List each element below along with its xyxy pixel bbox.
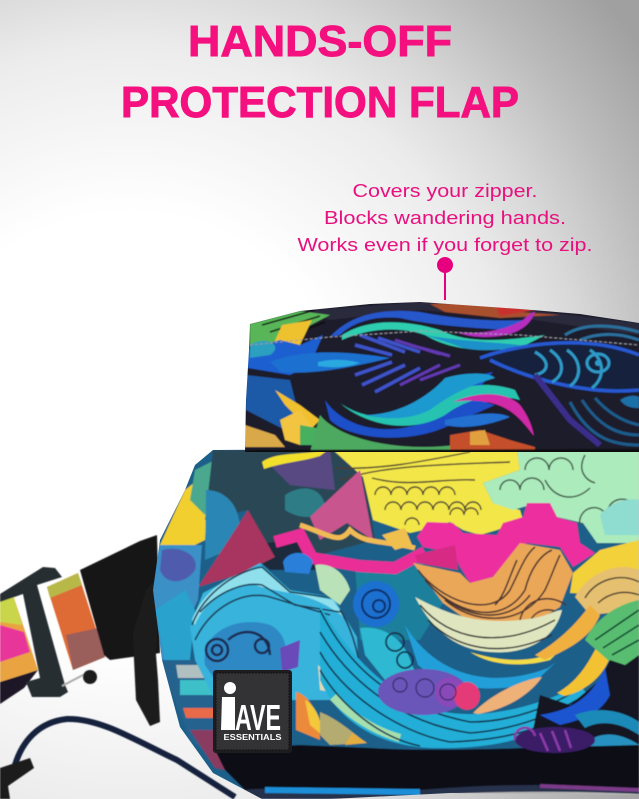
flap [240, 298, 639, 454]
right yellow band and green [556, 648, 610, 697]
lower magenta [453, 394, 534, 436]
peach swoop [473, 677, 542, 714]
pink ribbon [275, 535, 425, 568]
side blue pocket [150, 545, 202, 660]
upper magenta [457, 312, 535, 337]
side pocket yellow [160, 483, 206, 546]
bottom piping [240, 785, 639, 799]
mint clouds [483, 450, 639, 543]
orange strap [47, 573, 105, 670]
magenta cloud [417, 503, 595, 583]
bag body [150, 445, 639, 799]
title: HANDS-OFF [188, 17, 452, 66]
lower strap [15, 719, 235, 797]
buckle [0, 567, 68, 697]
dark upper left pattern [205, 450, 375, 560]
cream swoop [415, 597, 562, 652]
flap stitching [250, 331, 639, 345]
flap lower green [310, 415, 455, 452]
right yellow clouds [570, 540, 639, 597]
caption text: Covers your zipper. [352, 181, 538, 201]
title: PROTECTION FLAP [121, 78, 519, 127]
centre band behind ribbon [355, 560, 445, 640]
orange waves [413, 543, 573, 627]
bottom dark band [215, 745, 639, 795]
caption text: Blocks wandering hands. [324, 208, 566, 228]
left strap [0, 595, 38, 682]
logo patch [213, 670, 292, 753]
sails [310, 470, 373, 540]
purple cloud [378, 669, 468, 715]
blue swirl left [205, 622, 286, 680]
logo mark: AVE [235, 697, 281, 738]
flap bottom shadow [240, 449, 639, 453]
flap lower red [450, 430, 535, 452]
flap top edge colours [300, 302, 639, 335]
lower left shapes [280, 640, 300, 672]
centre blue curls [353, 581, 399, 627]
flap right eye [480, 342, 639, 393]
logo wordmark: ESSENTIALS [224, 732, 282, 742]
callout pointer [437, 257, 453, 300]
flap central leaf [270, 352, 390, 373]
flap feathers [355, 335, 420, 392]
lower clip [0, 758, 34, 799]
small hook [62, 674, 85, 686]
blue curl top [283, 553, 313, 574]
turquoise swoops [320, 605, 592, 748]
upper blue band [330, 311, 523, 337]
flap upper right [565, 326, 639, 340]
flap left patterns [249, 310, 330, 345]
flap lower right [570, 398, 639, 445]
right dark and blue [530, 655, 639, 745]
caption text [298, 181, 592, 255]
caption text: Works even if you forget to zip. [298, 235, 592, 255]
strap and buckle [0, 535, 235, 799]
lower wave [325, 372, 495, 438]
light blue wave [190, 563, 360, 700]
side stripes [162, 660, 213, 748]
yellow clouds [333, 450, 523, 535]
zipper pull [133, 580, 160, 726]
black strap [80, 535, 160, 660]
title [121, 17, 519, 127]
